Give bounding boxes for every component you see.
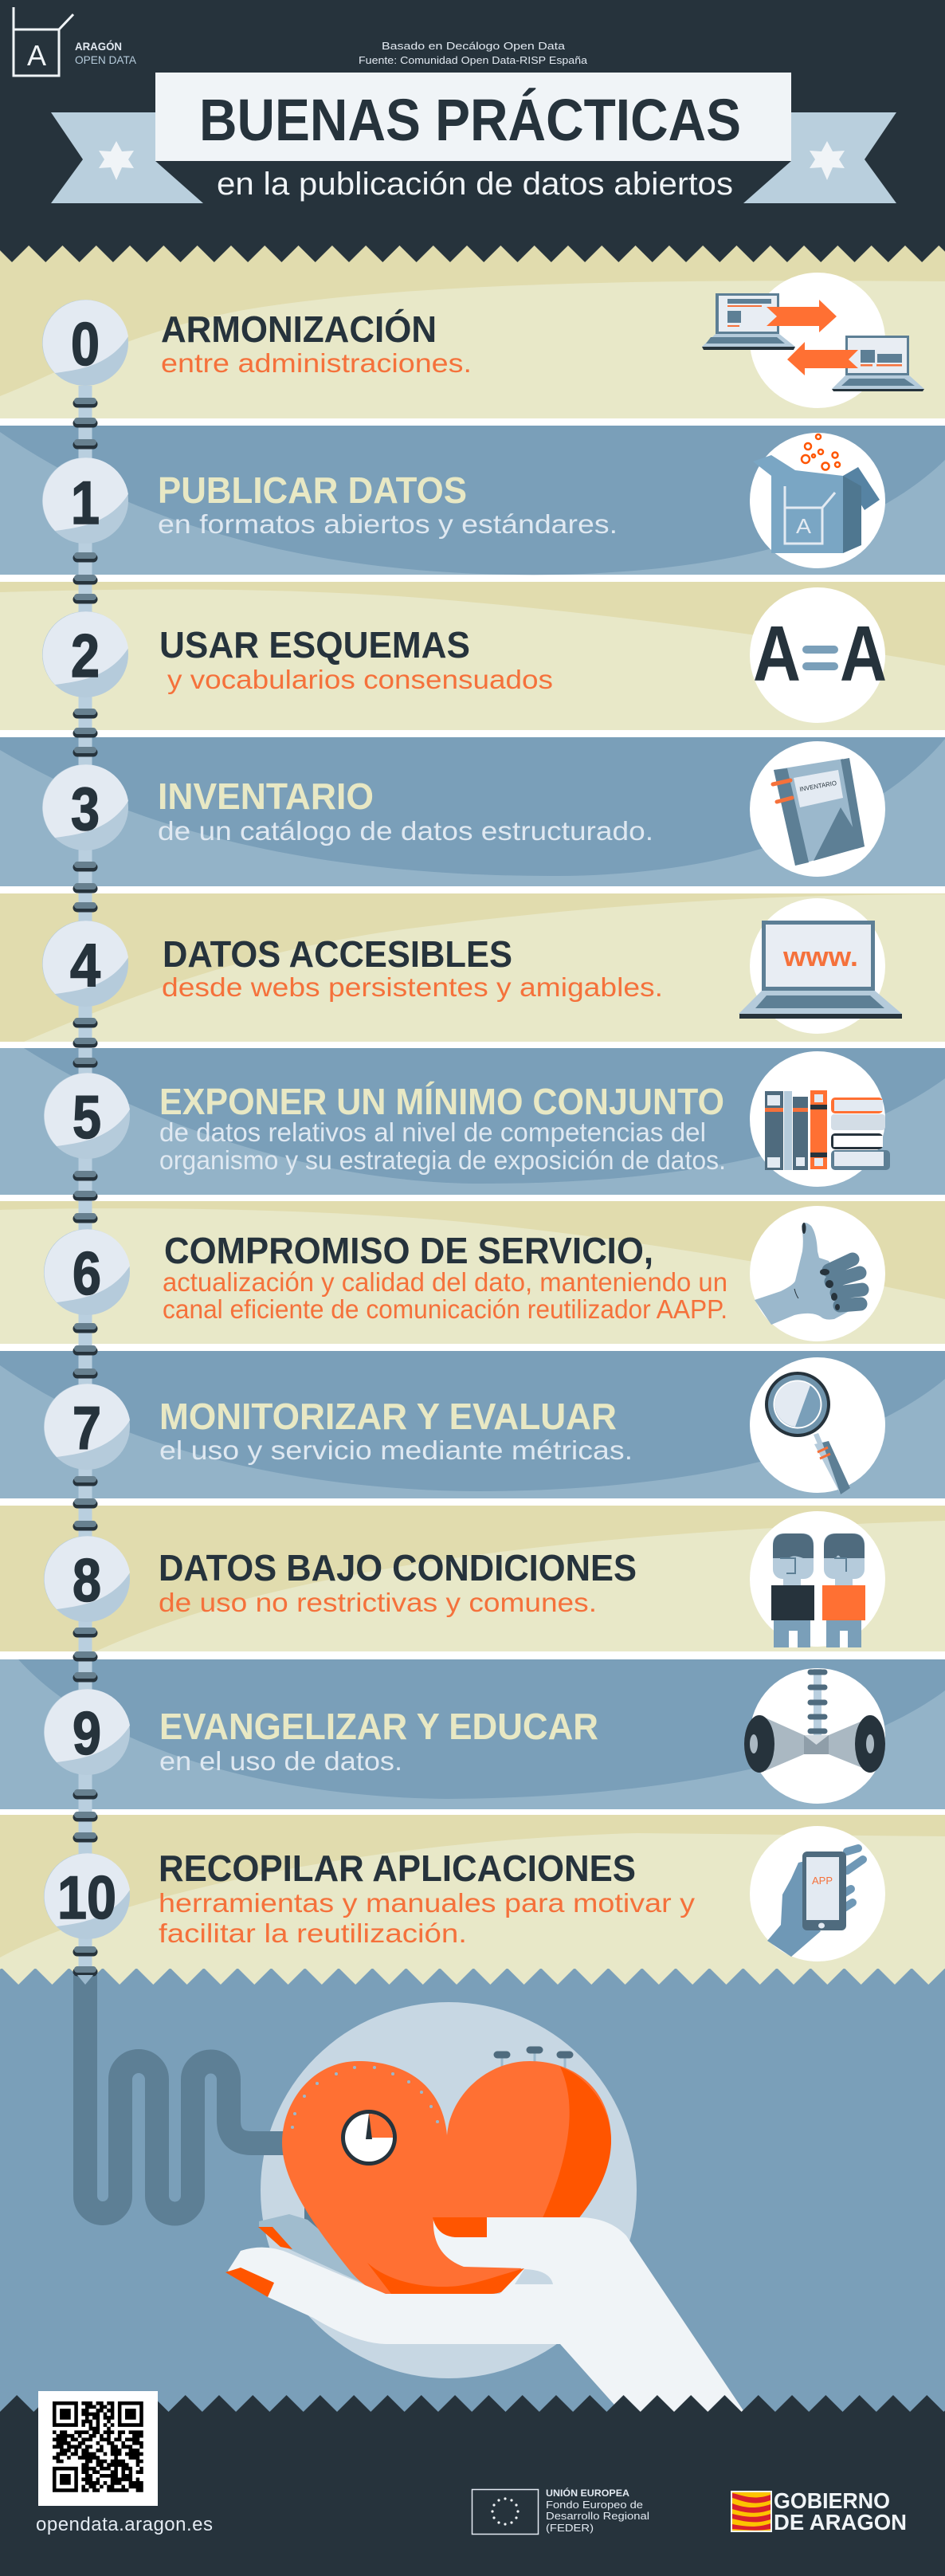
number badge 2	[42, 611, 128, 697]
number badge 6	[44, 1229, 130, 1315]
description: en formatos abiertos y estándares.	[158, 509, 618, 539]
heading: EVANGELIZAR Y EDUCAR	[159, 1706, 598, 1747]
description: canal eficiente de comunicación reutilizador AAPP.	[163, 1294, 727, 1324]
illustration: heart held in a hand	[85, 1975, 744, 2412]
heading: MONITORIZAR Y EVALUAR	[159, 1396, 617, 1437]
icon: A equals A	[750, 587, 887, 723]
header	[0, 0, 945, 247]
description: actualización y calidad del dato, manteniendo un	[163, 1267, 727, 1297]
panel: row 7 monitorizar y evaluar	[0, 1351, 945, 1498]
number badge 9: 9	[73, 1700, 101, 1768]
description: el uso y servicio mediante métricas.	[159, 1435, 633, 1465]
icon: notebook: INVENTARIO	[799, 779, 837, 793]
subtitle: en la publicación de datos abiertos	[217, 167, 733, 202]
logo: Aragón Open Data	[14, 7, 137, 76]
heading: INVENTARIO	[158, 776, 374, 817]
icon: laptop www	[739, 898, 902, 1034]
logo: Aragón Open Data: ARAGÓN	[75, 39, 122, 53]
number badge 3	[42, 764, 128, 850]
panel: row 6 compromiso de servicio	[0, 1201, 945, 1344]
description: de un catálogo de datos estructurado.	[158, 816, 653, 846]
footer	[0, 2391, 945, 2576]
number badge 5	[44, 1073, 130, 1159]
heading: COMPROMISO DE SERVICIO,	[164, 1230, 653, 1271]
number badge 6: 6	[73, 1240, 101, 1308]
number badge 10: 10	[57, 1864, 116, 1932]
description: y vocabularios consensuados	[167, 665, 553, 694]
number badge 1	[42, 457, 128, 544]
number badge 7	[44, 1384, 130, 1470]
number badge 7: 7	[73, 1395, 101, 1463]
description: de uso no restrictivas y comunes.	[159, 1588, 597, 1617]
logo: Gobierno de Aragón: DE ARAGON	[774, 2510, 907, 2535]
hand	[225, 2217, 744, 2412]
logo: Gobierno de Aragón: GOBIERNO	[774, 2488, 890, 2513]
logo: European Union FEDER	[472, 2487, 649, 2535]
number badge 0: 0	[71, 311, 100, 379]
panel: row 10 recopilar aplicaciones	[0, 1815, 945, 1985]
panel: row 2 usar esquemas	[0, 582, 945, 730]
panel: row 5 exponer un mínimo conjunto	[0, 1048, 945, 1195]
number badge 9	[44, 1689, 130, 1775]
panel: row 3 inventario	[0, 737, 945, 886]
icon: notebook	[750, 741, 885, 877]
description: facilitar la reutilización.	[159, 1918, 467, 1948]
number badge 4: 4	[70, 932, 100, 999]
heading: RECOPILAR APLICACIONES	[159, 1848, 636, 1889]
description	[159, 1888, 696, 1948]
description: herramientas y manuales para motivar y	[159, 1888, 696, 1918]
icon: laptops exchanging data	[702, 273, 924, 408]
panel: row 0 armonización	[0, 245, 945, 418]
number badge 10	[44, 1853, 130, 1939]
heading: ARMONIZACIÓN	[161, 308, 437, 350]
description	[163, 1267, 727, 1324]
number badge 8	[44, 1536, 130, 1622]
website: opendata.aragon.es	[36, 2514, 213, 2535]
icon: magnifying glass	[750, 1357, 885, 1494]
ribbon tails	[51, 112, 896, 203]
heading: DATOS BAJO CONDICIONES	[159, 1547, 637, 1588]
heading: PUBLICAR DATOS	[158, 469, 467, 511]
number badge 2: 2	[71, 622, 100, 690]
logo: European Union FEDER: UNIÓN EUROPEA	[546, 2487, 629, 2499]
logo: European Union FEDER: Desarrollo Regional	[546, 2510, 649, 2522]
description: entre administraciones.	[161, 348, 472, 378]
source text: Fuente: Comunidad Open Data-RISP España	[359, 54, 588, 66]
icon: open box	[750, 433, 885, 568]
icon: laptop www: www.	[782, 942, 858, 972]
logo: European Union FEDER: (FEDER)	[546, 2522, 594, 2534]
source text: Basado en Decálogo Open Data	[382, 40, 566, 52]
clips on heart	[497, 2050, 570, 2072]
description: organismo y su estrategia de exposición de datos.	[159, 1145, 726, 1175]
panel: row 9 evangelizar y educar	[0, 1659, 945, 1809]
icon: megaphones	[744, 1668, 885, 1804]
icon: thumbs up	[750, 1206, 885, 1341]
icon: A equals A: A	[753, 610, 801, 697]
icon: books	[750, 1051, 890, 1187]
description: de datos relativos al nivel de competencias del	[159, 1117, 706, 1147]
backdrop circle	[261, 2002, 637, 2378]
number badge 5: 5	[73, 1084, 101, 1152]
spine connecting numbers	[77, 386, 93, 1985]
pipe	[85, 1975, 284, 2214]
icon: phone in hand: APP	[812, 1875, 833, 1887]
heading: DATOS ACCESIBLES	[163, 933, 512, 975]
back finger	[258, 2196, 394, 2294]
title banner: BUENAS PRÁCTICAS	[199, 87, 741, 153]
icon: A equals A: A	[840, 610, 887, 697]
gauge	[341, 2110, 397, 2166]
description: en el uso de datos.	[159, 1746, 402, 1776]
number badge 0	[42, 300, 128, 386]
number badge 1: 1	[71, 469, 100, 537]
icon: phone in hand	[750, 1826, 885, 1961]
logo: European Union FEDER: Fondo Europeo de	[546, 2499, 643, 2511]
logo: Aragón Open Data: OPEN DATA	[75, 53, 137, 66]
number badge 3: 3	[71, 776, 100, 843]
description: desde webs persistentes y amigables.	[162, 972, 663, 1002]
icon: ribbon stars	[99, 141, 845, 180]
panel: row 8 datos bajo condiciones	[0, 1506, 945, 1651]
description	[159, 1117, 726, 1175]
logo: Gobierno de Aragón	[731, 2488, 907, 2535]
logo: Aragón Open Data: A	[27, 39, 46, 72]
heading: EXPONER UN MÍNIMO CONJUNTO	[159, 1081, 724, 1122]
panel: row 1 publicar datos	[0, 426, 945, 575]
title banner	[155, 73, 791, 161]
icon: open box: A	[796, 514, 812, 538]
bottom section background	[0, 1961, 945, 2439]
number badge 8: 8	[73, 1547, 101, 1615]
source text	[359, 40, 588, 66]
icon: two people	[750, 1511, 885, 1647]
panel: row 4 datos accesibles	[0, 893, 945, 1042]
heart	[282, 2061, 611, 2295]
heading: USAR ESQUEMAS	[159, 624, 470, 666]
QR code	[38, 2391, 158, 2506]
top zigzag edge	[0, 245, 945, 262]
number badge 4	[42, 921, 128, 1007]
